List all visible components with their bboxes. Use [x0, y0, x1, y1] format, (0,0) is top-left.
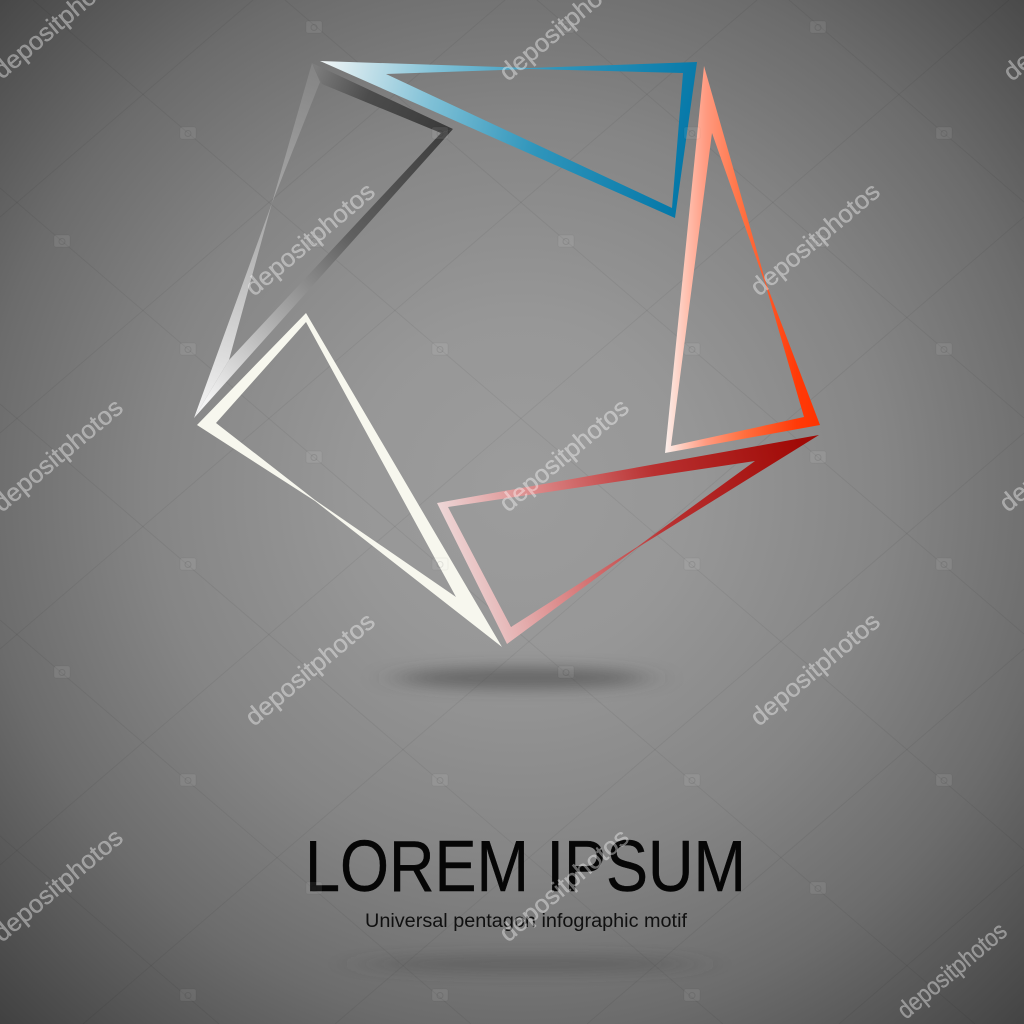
watermarks: depositphotos [240, 607, 380, 732]
segment: orange [665, 66, 820, 453]
subtitle: Universal pentagon infographic motif [365, 911, 688, 932]
segment: grey [194, 63, 453, 418]
segment: blue [320, 61, 697, 218]
segment: white [197, 313, 502, 647]
watermarks: depositphotos [240, 177, 380, 302]
ground shadow under title [365, 955, 695, 973]
title: LOREM IPSUM [305, 827, 746, 907]
watermarks: depositphotos [745, 607, 885, 732]
watermarks: depositphotos [494, 393, 634, 518]
watermarks: depositphotos [745, 177, 885, 302]
watermarks: depositphotos [494, 823, 634, 948]
ground shadow under pentagon [397, 667, 647, 689]
pentagon motif [194, 61, 820, 647]
segment: dark red [437, 435, 819, 644]
